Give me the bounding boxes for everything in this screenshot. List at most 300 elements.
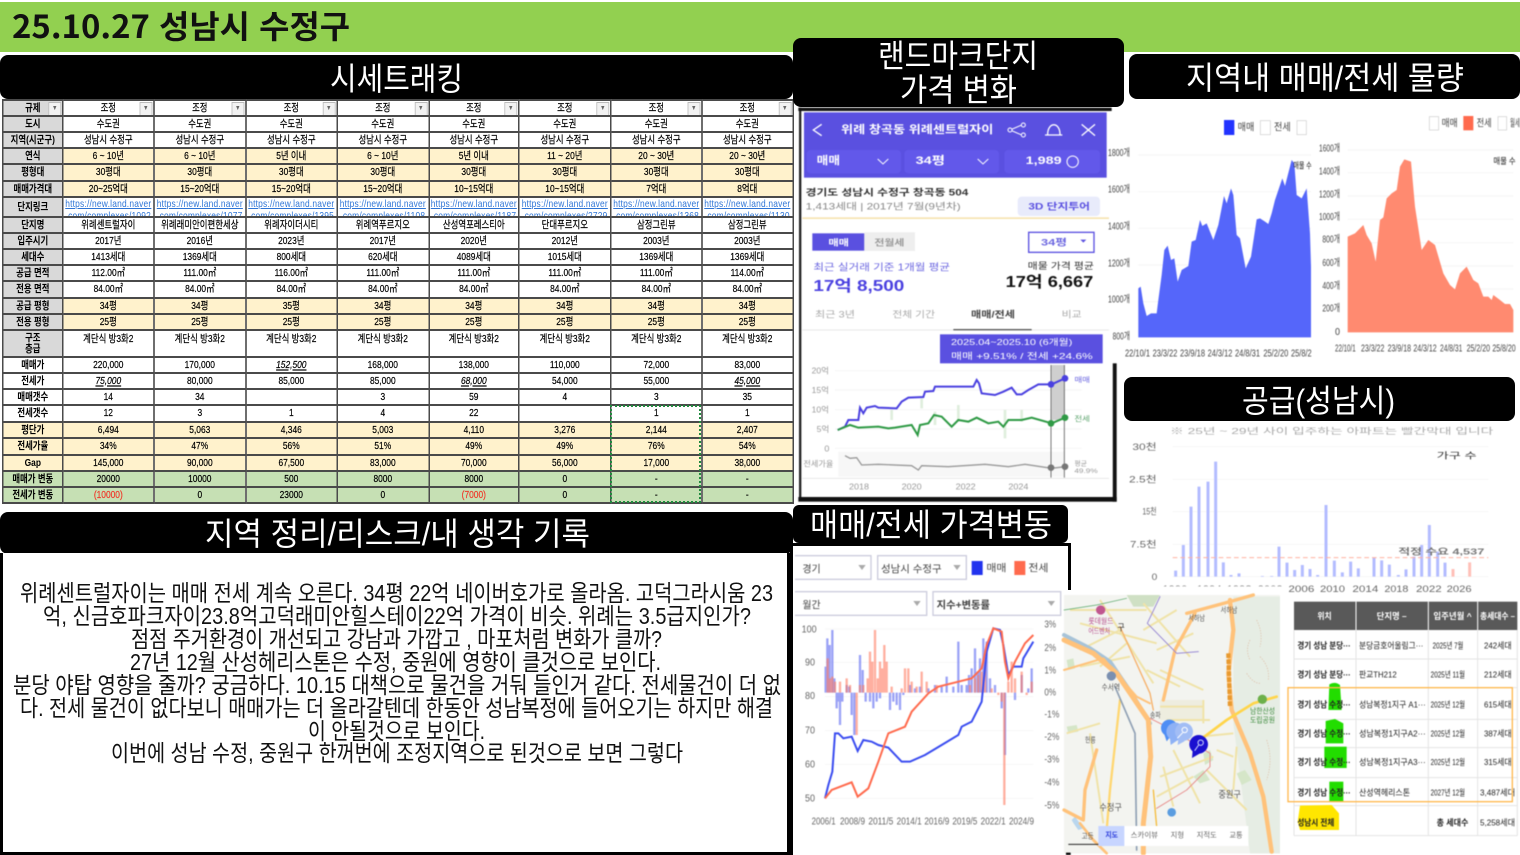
table text: 분당금호어울림그··· <box>1359 639 1423 650</box>
line chart: 전세 <box>1074 414 1090 423</box>
map labels: 남한산성 <box>1250 706 1275 715</box>
price toggles: 매물 가격 평균 <box>1028 260 1094 271</box>
panel: price tracking table: 3 <box>380 391 385 403</box>
panel: price tracking table: 76% <box>648 440 665 452</box>
panel: price tracking table: 0 <box>197 489 202 501</box>
table text: 2025년 12월 <box>1431 728 1465 739</box>
panel: price tracking table: 조정 <box>284 102 299 114</box>
panel: price tracking table: 90,000 <box>187 457 213 469</box>
line chart: 평균 <box>1074 459 1087 468</box>
panel: price tracking table: 25평 <box>100 316 117 328</box>
panel: price tracking table: ▼ <box>52 105 58 112</box>
map type tabs: 지형 <box>1171 831 1184 840</box>
panel: price tracking table: 수도권 <box>462 118 485 130</box>
app header: 1,989 <box>1026 155 1062 167</box>
heading: regional listing volume <box>1129 54 1520 99</box>
map labels: 어드벤처 <box>1088 626 1110 635</box>
panel: price tracking table: 조정 <box>375 102 391 114</box>
table text: 성남복정1지구 A1··· <box>1359 700 1426 710</box>
panel: supply bar chart: 2026 <box>1447 584 1472 594</box>
panel: price tracking table: 22 <box>469 407 478 419</box>
panel: price tracking table: 층급 <box>25 342 41 354</box>
jeonse listing area chart: 22/10/1 <box>1335 344 1356 355</box>
map labels <box>1082 606 1275 840</box>
price toggles <box>812 232 1094 295</box>
panel: price tracking table: 111.00㎡ <box>366 267 399 279</box>
panel: supply bar chart: 2022 <box>1416 584 1442 594</box>
panel: price tracking table: 34평 <box>465 300 482 312</box>
tooltip <box>940 334 1103 363</box>
panel: price tracking table: ▼ <box>691 105 697 112</box>
sale listing area chart: 24/3/12 <box>1208 349 1233 360</box>
panel: price tracking table: 조정 <box>740 102 755 114</box>
axis labels: -5% <box>1044 800 1059 811</box>
panel: price tracking table: 49% <box>465 440 482 452</box>
panel: price tracking table: 계단식 방3화2 <box>83 333 133 345</box>
panel: price tracking table: 5,063 <box>189 424 210 436</box>
panel: price tracking table: 15~20억대 <box>272 183 311 195</box>
line chart: 2018 <box>849 482 870 491</box>
table text: 387세대 <box>1484 729 1512 739</box>
panel: price tracking table: 152,500 <box>276 359 306 371</box>
line chart <box>802 365 1109 491</box>
table text: 3,487세대 <box>1480 788 1515 798</box>
panel: price tracking table: 17,000 <box>643 457 669 469</box>
panel: price tracking table: 25평 <box>191 316 208 328</box>
table text: 경기 성남 분당··· <box>1297 639 1351 650</box>
heading: notes <box>0 512 793 554</box>
panel: price tracking table: 30평대 <box>370 166 395 178</box>
panel: price tracking table: 500 <box>284 473 298 485</box>
panel: price tracking table: 25평 <box>374 316 391 328</box>
filter dropdowns: 매매 <box>986 563 1006 575</box>
panel: price tracking table: - <box>655 473 658 485</box>
sale listing area chart: 매물 수 <box>1293 161 1312 171</box>
panel: price tracking table: 49% <box>556 440 573 452</box>
panel: location map <box>1060 592 1280 855</box>
panel: price tracking table: 3 <box>654 391 659 403</box>
table text: 총 세대수 <box>1437 817 1468 828</box>
sale listing area chart: 1200개 <box>1108 258 1130 270</box>
panel: price tracking table: - <box>655 489 658 501</box>
panel: price tracking table: 성남시 수정구 <box>358 134 407 146</box>
sale listing area chart <box>1108 120 1312 360</box>
panel: price tracking table: 110,000 <box>550 359 580 371</box>
panel: price tracking table: (7000) <box>462 489 486 501</box>
line chart: 매매 <box>1074 376 1090 384</box>
panel: price tracking table: 계단식 방3화2 <box>722 333 772 345</box>
panel: supply bar chart: 15천 <box>1142 507 1157 517</box>
panel: price tracking table: 14 <box>104 391 113 403</box>
sale listing area chart: 22/10/1 <box>1125 349 1150 360</box>
panel: price tracking table: - <box>746 489 749 501</box>
panel: price tracking table: 6,494 <box>98 424 119 436</box>
panel: price tracking table: 15~20억대 <box>180 183 219 195</box>
panel: price tracking table: 83,000 <box>370 457 396 469</box>
panel: price tracking table: 34% <box>100 440 117 452</box>
panel: price tracking table: 34 <box>195 391 204 403</box>
axis labels <box>802 620 1059 827</box>
axis labels: 50 <box>805 794 815 805</box>
axis labels: 90 <box>805 658 815 669</box>
panel: price tracking table: 매매가격대 <box>13 183 52 195</box>
panel: price tracking table: 138,000 <box>459 359 489 371</box>
tabs: 전체 기간 <box>892 309 935 319</box>
panel: price tracking table: 116.00㎡ <box>275 267 308 279</box>
panel: price tracking table: 2,407 <box>737 424 758 436</box>
panel: price tracking table: 34평 <box>739 300 756 312</box>
panel: price tracking table: 111.00㎡ <box>457 267 490 279</box>
panel: price tracking table: 단지링크 <box>17 201 48 213</box>
filter dropdowns: 경기 <box>802 562 821 575</box>
panel: price tracking table: 6 ~ 10년 <box>93 150 124 162</box>
panel: price tracking table: 20000 <box>97 473 120 485</box>
panel: price tracking table: ▼ <box>782 105 788 112</box>
map labels: 수정구 <box>1099 803 1122 813</box>
app header: 매매 <box>817 154 840 167</box>
panel: price tracking table: 34평 <box>191 300 208 312</box>
axis labels: 2008/9 <box>840 816 865 827</box>
panel: price tracking table: 34평 <box>556 300 573 312</box>
tabs: 매매/전세 <box>971 308 1015 319</box>
panel: price tracking table: 조정 <box>101 102 116 114</box>
panel: price tracking table: 성남시 수정구 <box>267 134 316 146</box>
panel: price tracking table: 조정 <box>557 102 573 114</box>
sale listing area chart: 1800개 <box>1108 147 1130 159</box>
panel: supply bar chart: 7.5천 <box>1130 539 1157 549</box>
panel: supply bar chart: 2014 <box>1352 584 1378 594</box>
heading: supply <box>1124 377 1515 421</box>
jeonse listing area chart: 1400개 <box>1319 165 1340 177</box>
map labels: 송파 <box>1150 710 1161 719</box>
filter dropdowns: 성남시 수정구 <box>881 563 942 575</box>
panel: price tracking table: 80,000 <box>187 375 213 387</box>
panel: supply bar chart: 2002 <box>1258 584 1283 594</box>
table text: 2025년 12월 <box>1431 699 1465 710</box>
axis labels: 0% <box>1044 688 1056 699</box>
heading: price tracking: 시세트래킹 <box>330 61 463 97</box>
panel: price tracking table: 위례래미안이편한세상 <box>161 219 238 231</box>
axis labels: -2% <box>1044 732 1059 743</box>
panel: price tracking table: 성남시 수정구 <box>175 134 224 146</box>
panel: price tracking table: 6 ~ 10년 <box>367 150 398 162</box>
panel: price tracking table: 매매갯수 <box>17 391 48 403</box>
panel: price tracking table: 8000 <box>373 473 392 485</box>
panel: price tracking table: 2003년 <box>643 235 670 247</box>
jeonse listing area chart <box>1319 116 1520 355</box>
panel: price tracking table: 4 <box>562 391 567 403</box>
tooltip: 매매 +9.51% / 전세 +24.6% <box>951 351 1093 361</box>
panel: price tracking table: 30평대 <box>187 166 212 178</box>
map type tabs: 스카이뷰 <box>1131 830 1158 840</box>
panel: price tracking table: 수도권 <box>188 118 211 130</box>
panel: price tracking table: 공급 평형 <box>16 300 49 312</box>
axis labels: -1% <box>1044 710 1059 721</box>
panel: price tracking table: 2023년 <box>278 235 305 247</box>
panel: price tracking table: 1413세대 <box>91 251 125 263</box>
jeonse listing area chart: 전세 <box>1477 118 1492 130</box>
map type tabs: 교통 <box>1229 831 1243 840</box>
line chart: 전세가율 <box>803 458 833 468</box>
map type tabs <box>1066 826 1248 855</box>
panel: price tracking table: 수도권 <box>553 118 576 130</box>
orange highlight box <box>1288 688 1512 802</box>
table text: 성남복정1지구A2··· <box>1359 729 1426 739</box>
line chart: 0 <box>824 444 830 453</box>
panel: price tracking table: 성남시 수정구 <box>632 134 681 146</box>
line chart: 49.9% <box>1074 468 1098 475</box>
panel: price tracking table: 20~25억대 <box>89 183 128 195</box>
heading: landmark price change: 랜드마크단지 <box>878 38 1038 74</box>
panel: price tracking table: 계단식 방3화2 <box>175 333 225 345</box>
panel: price tracking table: - <box>746 473 749 485</box>
panel: price tracking table: 85,000 <box>278 375 304 387</box>
monthly change bars <box>826 630 1032 805</box>
axis labels: -4% <box>1044 778 1059 789</box>
sale listing area chart: 1400개 <box>1108 220 1130 232</box>
panel: price tracking table: 세대수 <box>21 251 44 263</box>
panel: price tracking table: 84.00㎡ <box>459 283 489 295</box>
heading: landmark price change <box>793 38 1124 107</box>
jeonse listing area chart: 800개 <box>1322 234 1340 246</box>
panel: price tracking table: 2012년 <box>552 235 578 247</box>
jeonse listing area chart: 600개 <box>1322 257 1340 269</box>
table text: 경기 성남 분당··· <box>1297 669 1351 680</box>
panel: price tracking table: 6 ~ 10년 <box>184 150 215 162</box>
panel: price tracking table: 168,000 <box>368 359 398 371</box>
axis labels: 70 <box>805 725 815 736</box>
panel: price tracking table: 1369세대 <box>730 251 764 263</box>
panel: price tracking table: 83,000 <box>734 359 760 371</box>
panel: notes text: 이번에 성남 수정, 중원구 한꺼번에 조정지역으로 된것으로 보면 그렇다 <box>111 740 683 766</box>
panel: price tracking table: 계단식 방3화2 <box>631 333 681 345</box>
panel: price tracking table: 입주시기 <box>17 235 48 247</box>
map labels: 서하남 <box>1188 614 1205 623</box>
jeonse listing area chart: 1200개 <box>1319 189 1340 201</box>
panel: price tracking table: 산성역포레스티아 <box>443 219 505 231</box>
panel: price tracking table: 112.00㎡ <box>92 267 125 279</box>
highlight marks <box>1298 683 1347 830</box>
panel: notes text: 27년 12월 산성헤리스톤은 수정, 중원에 영향이 클것으로 보인다. <box>130 649 661 675</box>
map labels: 중원구 <box>1218 789 1241 799</box>
axis labels: 2022/1 <box>981 816 1006 827</box>
price toggles: 매매 <box>828 236 849 247</box>
panel: price tracking table: ▼ <box>508 105 514 112</box>
axis labels: 1% <box>1044 665 1056 676</box>
address: 3D 단지투어 <box>1028 202 1090 212</box>
panel: supply bar chart: 2.5천 <box>1129 475 1157 485</box>
panel: price tracking table: 수도권 <box>645 118 668 130</box>
panel: price tracking table: 수도권 <box>97 118 120 130</box>
app header: 위례 창곡동 위례센트럴자이 <box>841 122 993 136</box>
panel: price tracking table: 75,000 <box>95 375 121 387</box>
sale listing area chart: 23/3/22 <box>1153 349 1178 360</box>
axis labels: 2011/5 <box>868 816 894 827</box>
panel: price tracking table: 조정 <box>466 102 482 114</box>
panel: supply bar chart: ※ 25년 ~ 29년 사이 입주하는 아파트는 빨간막대 입니다 <box>1170 426 1494 436</box>
panel: price tracking table: 84.00㎡ <box>94 283 123 295</box>
panel: price tracking table: 단지명 <box>21 219 44 231</box>
panel: price tracking table: (10000) <box>94 489 123 501</box>
panel: supply bar chart: 1994 <box>1197 584 1222 594</box>
panel: price tracking table: 15~20억대 <box>363 183 402 195</box>
panel: landmark apartment app screenshot <box>798 107 1118 503</box>
table text: 경기 성남 수정··· <box>1297 699 1351 710</box>
panel: price tracking table: 25평 <box>465 316 482 328</box>
tabs: 비교 <box>1062 309 1082 319</box>
table text: 2025년 12월 <box>1431 756 1465 767</box>
panel: price tracking table: 8억대 <box>737 183 757 195</box>
panel: price tracking table: 4089세대 <box>457 251 491 263</box>
panel: price tracking table: 0 <box>562 489 567 501</box>
panel: price tracking table: 30평대 <box>96 166 121 178</box>
app header <box>804 112 1107 178</box>
sale listing area chart: 23/9/18 <box>1180 349 1205 360</box>
axis labels: 80 <box>805 691 815 702</box>
panel: price tracking table: 55,000 <box>643 375 669 387</box>
table text: 경기 성남 수정··· <box>1297 787 1351 798</box>
panel: price tracking table: 3 <box>197 407 202 419</box>
heading: price tracking <box>0 55 793 99</box>
panel: price tracking table: 30평대 <box>552 166 577 178</box>
panel: price tracking table: 67,500 <box>278 457 304 469</box>
panel: price tracking table: ▼ <box>235 105 241 112</box>
table text: 경기 성남 수정··· <box>1297 756 1351 767</box>
panel: price tracking table: 145,000 <box>93 457 123 469</box>
panel: listing volume charts <box>1108 115 1520 360</box>
map labels: 구 <box>1117 623 1125 633</box>
panel: price tracking table: 10000 <box>188 473 211 485</box>
panel: notes text <box>0 553 790 855</box>
filter dropdowns: 지수+변동률 <box>937 599 990 611</box>
line chart: 15억 <box>812 385 829 395</box>
panel: price tracking table: 2016년 <box>187 235 213 247</box>
line chart: 2020 <box>902 482 922 491</box>
map labels: 도립공원 <box>1250 716 1275 725</box>
panel: price tracking table: 800세대 <box>277 251 306 263</box>
panel: price tracking table: 4 <box>380 407 385 419</box>
axis labels: 100 <box>802 624 817 635</box>
panel: supply bar chart: 2018 <box>1384 584 1408 594</box>
panel: price tracking table: 성남시 수정구 <box>84 134 133 146</box>
panel: price tracking table: 전용 면적 <box>16 283 49 295</box>
table text: 242세대 <box>1484 640 1512 650</box>
panel: price tracking table: 전세갯수 <box>17 407 48 419</box>
axis labels: 2024/9 <box>1009 816 1034 827</box>
panel: supply bar chart: 0 <box>1152 572 1157 582</box>
filter dropdowns <box>792 556 1061 615</box>
panel: price tracking table: 1 <box>289 407 294 419</box>
panel: price tracking table: 수도권 <box>280 118 303 130</box>
panel: price tracking table: 평형대 <box>21 166 44 178</box>
panel: price tracking table: 2,144 <box>646 424 667 436</box>
map labels: 헌릉 <box>1085 736 1096 745</box>
sale listing area chart: 25/8/2 <box>1291 349 1312 360</box>
panel: price tracking table: 계단식 방3화2 <box>540 333 590 345</box>
map labels: 고등 <box>1082 831 1094 840</box>
jeonse listing area chart: 24/3/12 <box>1413 344 1437 355</box>
sale listing area chart: 25/2/20 <box>1263 349 1289 360</box>
panel: price tracking table: 30평대 <box>461 166 486 178</box>
axis labels: 2014/1 <box>897 816 922 827</box>
price toggles: 34평 <box>1041 238 1067 248</box>
panel: price tracking table: 25평 <box>739 316 756 328</box>
panel: price tracking table: 84.00㎡ <box>733 283 762 295</box>
sale listing area chart: 24/8/31 <box>1235 349 1260 360</box>
address: 1,413세대 | 2017년 7월(9년차) <box>806 201 961 212</box>
panel: price tracking table: 620세대 <box>368 251 398 263</box>
panel: price tracking table: 114.00㎡ <box>731 267 764 279</box>
table text: 2027년 12월 <box>1431 787 1465 798</box>
panel: price tracking table: 20 ~ 30년 <box>638 150 674 162</box>
panel: price tracking table: 계단식 방3화2 <box>358 333 408 345</box>
panel: price tracking table: 85,000 <box>370 375 396 387</box>
axis labels: 60 <box>805 759 815 770</box>
sale listing area chart: 매매 <box>1238 122 1254 134</box>
panel: price tracking table: 84.00㎡ <box>642 283 671 295</box>
panel: price tracking table: 35평 <box>283 300 300 312</box>
sale listing area chart: 1000개 <box>1108 294 1130 306</box>
sale listing area chart: 800개 <box>1113 330 1130 342</box>
panel: price tracking table: 2017년 <box>370 235 396 247</box>
panel: supply bar chart: 가구 수 <box>1437 451 1477 461</box>
app header: 34평 <box>916 155 945 167</box>
price toggles: 전월세 <box>874 236 904 247</box>
panel: price tracking table: 매매가 변동 <box>12 473 53 485</box>
tabs <box>802 308 1109 330</box>
heading: supply: 공급(성남시) <box>1242 383 1395 419</box>
panel: price tracking table: 조정 <box>192 102 208 114</box>
panel: price tracking table: 성남시 수정구 <box>540 134 589 146</box>
panel: supply bar chart <box>1129 426 1494 594</box>
panel: price tracking table: 7억대 <box>646 183 666 195</box>
jeonse listing area chart: 매물 수 <box>1493 156 1516 166</box>
panel: price tracking table: 1369세대 <box>639 251 673 263</box>
heading: notes: 지역 정리/리스크/내 생각 기록 <box>205 516 590 552</box>
panel: price tracking table <box>2 99 794 504</box>
panel: price tracking table: 수도권 <box>371 118 394 130</box>
panel: price tracking table: 25평 <box>283 316 300 328</box>
panel: price tracking table: 매매가 <box>21 359 44 371</box>
map labels: 서하남 <box>1221 606 1238 615</box>
panel: price tracking table: 조정 <box>649 102 664 114</box>
sale listing area chart: 전세 <box>1274 122 1291 134</box>
panel: price tracking table: 2003년 <box>734 235 761 247</box>
panel: price tracking table: 위례역푸르지오 <box>356 219 410 231</box>
line chart: 2022 <box>956 482 976 491</box>
panel: price tracking table: 계단식 방3화2 <box>266 333 316 345</box>
panel frame: price change <box>790 543 1071 855</box>
panel: supply bar chart: 2006 <box>1288 584 1314 594</box>
sale listing area chart: 1600개 <box>1108 184 1130 196</box>
map labels: 수서역 <box>1102 682 1120 692</box>
panel: price tracking table: Gap <box>25 457 41 469</box>
panel: price tracking table: 54% <box>739 440 756 452</box>
panel: price tracking table: 지역(시군구) <box>11 134 55 146</box>
index lines <box>825 628 1033 798</box>
panel: price tracking table: 전용 평형 <box>16 316 49 328</box>
panel: price tracking table: 11 ~ 20년 <box>547 150 582 162</box>
panel: price tracking table: 성남시 수정구 <box>449 134 498 146</box>
panel: price tracking table: 72,000 <box>643 359 669 371</box>
map type tabs: 지적도 <box>1197 830 1217 840</box>
panel: price tracking table: 5년 이내 <box>459 150 489 162</box>
panel: price tracking table: 51% <box>374 440 391 452</box>
panel: price tracking table: 1 <box>654 407 659 419</box>
map pins <box>1161 720 1208 758</box>
panel: price tracking table: 84.00㎡ <box>550 283 580 295</box>
axis labels: 2016/9 <box>924 816 950 827</box>
